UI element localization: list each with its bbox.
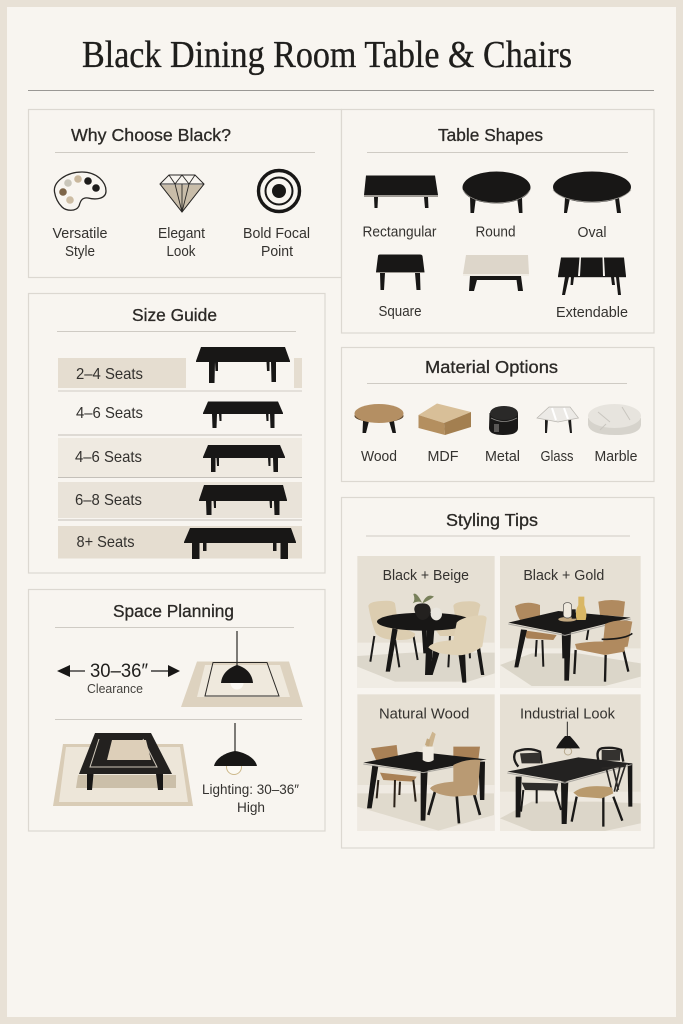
card: natural wood: Natural Wood bbox=[379, 706, 469, 722]
card: black + beige: Black + Beige bbox=[383, 568, 469, 584]
rug with table bbox=[53, 733, 193, 806]
row: 6-8 seats: 6–8 Seats bbox=[75, 492, 142, 509]
heading: material options: Material Options bbox=[425, 357, 558, 377]
row: 2-4 seats bbox=[58, 347, 302, 391]
label: versatile style: Versatile bbox=[52, 226, 108, 242]
extendable table bbox=[558, 258, 626, 295]
row: 4-6 seats alternate: 4–6 Seats bbox=[75, 449, 142, 466]
row: 4-6 seats bbox=[58, 402, 302, 435]
rectangular table bbox=[364, 176, 438, 208]
round table bbox=[462, 172, 530, 213]
material labels: Metal bbox=[485, 449, 520, 465]
label: elegant look: Look bbox=[166, 244, 196, 260]
table shape labels: Square bbox=[378, 304, 422, 320]
clearance dimension bbox=[57, 661, 180, 696]
square table bbox=[376, 254, 424, 290]
table shape labels: Oval bbox=[578, 225, 606, 241]
panel: size guide bbox=[28, 294, 325, 573]
label: bold focal point: Bold Focal bbox=[243, 226, 310, 242]
heading: space planning: Space Planning bbox=[113, 601, 234, 621]
heading: styling tips: Styling Tips bbox=[446, 510, 538, 530]
clearance dimension: Clearance bbox=[87, 682, 143, 696]
label: bold focal point bbox=[243, 226, 310, 260]
label: versatile style bbox=[52, 226, 108, 260]
label: versatile style: Style bbox=[65, 244, 95, 260]
heading: size guide: Size Guide bbox=[132, 305, 217, 325]
row: 4-6 seats alternate bbox=[58, 438, 302, 478]
card: industrial look bbox=[500, 694, 641, 831]
material labels: Marble bbox=[594, 449, 638, 465]
pendant lamp and lighting height: Lighting: 30–36″ bbox=[202, 782, 299, 797]
card: black + gold: Black + Gold bbox=[523, 568, 604, 584]
row: 2-4 seats: 2–4 Seats bbox=[76, 366, 143, 383]
card: natural wood bbox=[357, 694, 495, 831]
title: Black Dining Room Table & Chairs bbox=[82, 34, 572, 76]
MDF swatch bbox=[418, 404, 471, 435]
heading: why choose black: Why Choose Black? bbox=[71, 125, 231, 145]
label: elegant look: Elegant bbox=[158, 226, 205, 242]
panel: why choose black bbox=[28, 110, 342, 278]
material labels: Glass bbox=[540, 449, 574, 465]
panel: styling tips bbox=[342, 498, 654, 848]
glass swatch bbox=[537, 407, 578, 433]
card: industrial look: Industrial Look bbox=[520, 706, 616, 722]
table shape labels bbox=[362, 224, 628, 321]
metal swatch bbox=[489, 406, 518, 435]
icon: palette bbox=[54, 172, 106, 210]
beige table bbox=[463, 255, 529, 291]
table shape labels: Rectangular bbox=[362, 224, 437, 240]
material labels: Wood bbox=[361, 449, 397, 465]
heading: table shapes: Table Shapes bbox=[438, 125, 543, 145]
row: 8+ seats bbox=[58, 526, 302, 559]
card: black + gold bbox=[500, 556, 641, 688]
panel: material options bbox=[342, 348, 654, 482]
oval table bbox=[553, 172, 631, 213]
icon: diamond bbox=[160, 175, 204, 212]
scene cards bbox=[357, 556, 641, 831]
table shape labels: Round bbox=[476, 224, 516, 240]
panel: table shapes bbox=[342, 110, 654, 333]
pendant lamp and lighting height bbox=[202, 723, 299, 815]
panel: space planning bbox=[28, 590, 325, 831]
material labels bbox=[361, 449, 638, 465]
label: bold focal point: Point bbox=[261, 244, 293, 260]
rug with pendant lamp bbox=[181, 631, 303, 707]
table shape labels: Extendable bbox=[556, 305, 628, 321]
clearance dimension: 30–36″ bbox=[90, 661, 148, 682]
card: black + beige bbox=[357, 556, 495, 688]
marble swatch bbox=[588, 404, 641, 435]
icon: target bbox=[258, 170, 300, 212]
wood swatch bbox=[354, 404, 404, 433]
pendant lamp and lighting height: High bbox=[237, 800, 265, 815]
row: 4-6 seats: 4–6 Seats bbox=[76, 405, 143, 422]
row: 6-8 seats bbox=[58, 482, 302, 520]
material labels: MDF bbox=[428, 449, 459, 465]
label: elegant look bbox=[158, 226, 205, 260]
row: 8+ seats: 8+ Seats bbox=[76, 534, 134, 551]
